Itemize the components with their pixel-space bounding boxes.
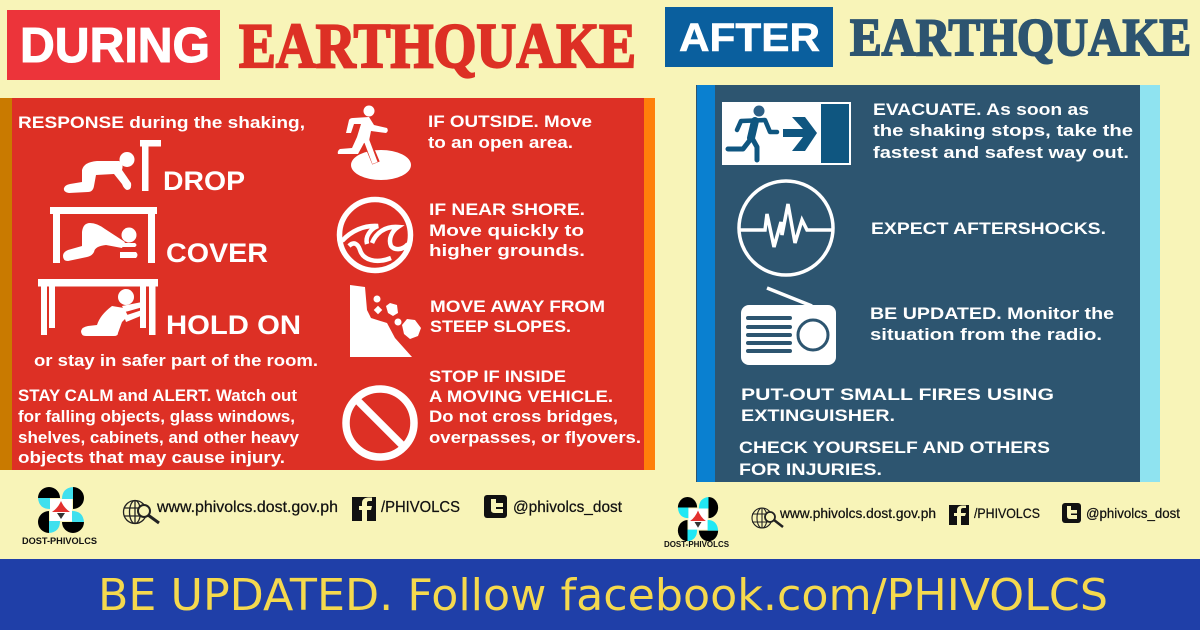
- text: dost-phivolcs: DOST-PHIVOLCS: [664, 540, 730, 549]
- text: facebook handle: /PHIVOLCS: [381, 499, 460, 516]
- icon: twitter: [1062, 503, 1081, 523]
- heading: after earthquake: AFTER: [679, 16, 820, 60]
- text: be updated: BE UPDATED. Monitor the: [870, 304, 1114, 323]
- text: put out small fires: EXTINGUISHER.: [741, 406, 895, 425]
- heading: during earthquake: [7, 10, 636, 81]
- text: dost-phivolcs: DOST-PHIVOLCS: [22, 536, 97, 547]
- footer: after panel contacts: [664, 497, 1180, 549]
- icon: exit sign: [722, 102, 851, 165]
- text: if near shore: [429, 200, 585, 260]
- text: evacuate: [873, 100, 1133, 162]
- text: website: www.phivolcs.dost.gov.ph: [156, 499, 338, 516]
- text: stop if inside a moving vehicle: [429, 367, 641, 447]
- heading: during earthquake: DURING: [20, 19, 210, 73]
- text: be updated: situation from the radio.: [870, 325, 1102, 344]
- icon: drop: [64, 140, 161, 193]
- icon: twitter: [484, 495, 507, 518]
- panel: after earthquake: [696, 85, 1160, 482]
- text: twitter handle: @phivolcs_dost: [513, 499, 623, 516]
- panel: during earthquake: [0, 98, 655, 470]
- icon: globe with magnifier: [124, 500, 159, 524]
- label: hold on: HOLD ON: [166, 310, 301, 340]
- text: if near shore: Move quickly to: [429, 221, 584, 240]
- text: check yourself and others: FOR INJURIES.: [739, 460, 882, 479]
- text: if outside: [428, 112, 592, 152]
- text: stop if inside a moving vehicle: Do not cross bridges,: [429, 407, 618, 426]
- text: website: www.phivolcs.dost.gov.ph: [779, 505, 936, 521]
- text: facebook handle: /PHIVOLCS: [974, 505, 1040, 521]
- text: stay calm and alert: objects that may cause injury.: [18, 448, 285, 467]
- text: stay calm and alert: STAY CALM and ALERT. Watch out: [18, 386, 297, 405]
- text: response intro: RESPONSE during the shaking,: [18, 113, 305, 132]
- icon: wave in circle: [340, 200, 410, 270]
- icon: seismograph circle: [739, 181, 833, 275]
- icon: facebook: [949, 505, 969, 525]
- text: expect aftershocks: EXPECT AFTERSHOCKS.: [871, 219, 1106, 238]
- text: evacuate: the shaking stops, take the: [873, 121, 1133, 140]
- text: stay calm and alert: [18, 386, 300, 467]
- icon: no entry sign: [346, 389, 414, 457]
- label: cover: COVER: [166, 238, 268, 268]
- text: if outside: IF OUTSIDE. Move: [428, 112, 592, 131]
- icon: hold on: [38, 279, 158, 336]
- text: put out small fires: [741, 385, 1054, 425]
- icon: radio: [741, 288, 836, 365]
- text: stop if inside a moving vehicle: A MOVING VEHICLE.: [429, 387, 613, 406]
- icon: cover: [50, 207, 157, 263]
- text: check yourself and others: CHECK YOURSELF AND OTHERS: [739, 438, 1050, 457]
- banner: follow on facebook: BE UPDATED. Follow facebook.com/PHIVOLCS: [98, 570, 1108, 621]
- text: move away from steep slopes: STEEP SLOPES.: [430, 317, 571, 336]
- label: drop: DROP: [163, 166, 245, 196]
- text: twitter handle: @phivolcs_dost: [1086, 505, 1180, 521]
- heading: after earthquake: [665, 7, 1191, 67]
- heading: during earthquake: EARTHQUAKE: [239, 10, 636, 81]
- icon: facebook: [352, 497, 376, 521]
- banner: follow on facebook: [0, 559, 1200, 630]
- text: evacuate: EVACUATE. As soon as: [873, 100, 1089, 119]
- icon: phivolcs logo: [678, 497, 718, 541]
- text: check yourself and others: [739, 438, 1050, 479]
- icon: phivolcs logo: [38, 487, 84, 533]
- text: safer part of the room: or stay in safer part of the room.: [34, 351, 318, 370]
- text: stay calm and alert: shelves, cabinets, and other heavy: [18, 428, 300, 447]
- text: be updated: [870, 304, 1114, 344]
- icon: runner on open area: [338, 106, 411, 180]
- icon: globe with magnifier: [752, 508, 783, 528]
- text: stay calm and alert: for falling objects, glass windows,: [18, 407, 295, 426]
- footer: during panel contacts: [22, 487, 623, 547]
- text: put out small fires: PUT-OUT SMALL FIRES USING: [741, 385, 1054, 404]
- text: if near shore: higher grounds.: [429, 241, 585, 260]
- icon: steep slope with falling rocks: [350, 285, 421, 357]
- text: stop if inside a moving vehicle: STOP IF INSIDE: [429, 367, 566, 386]
- text: move away from steep slopes: MOVE AWAY FROM: [430, 297, 605, 316]
- text: evacuate: fastest and safest way out.: [873, 143, 1129, 162]
- text: move away from steep slopes: [430, 297, 605, 336]
- text: stop if inside a moving vehicle: overpasses, or flyovers.: [429, 428, 641, 447]
- text: if near shore: IF NEAR SHORE.: [429, 200, 585, 219]
- text: if outside: to an open area.: [428, 133, 573, 152]
